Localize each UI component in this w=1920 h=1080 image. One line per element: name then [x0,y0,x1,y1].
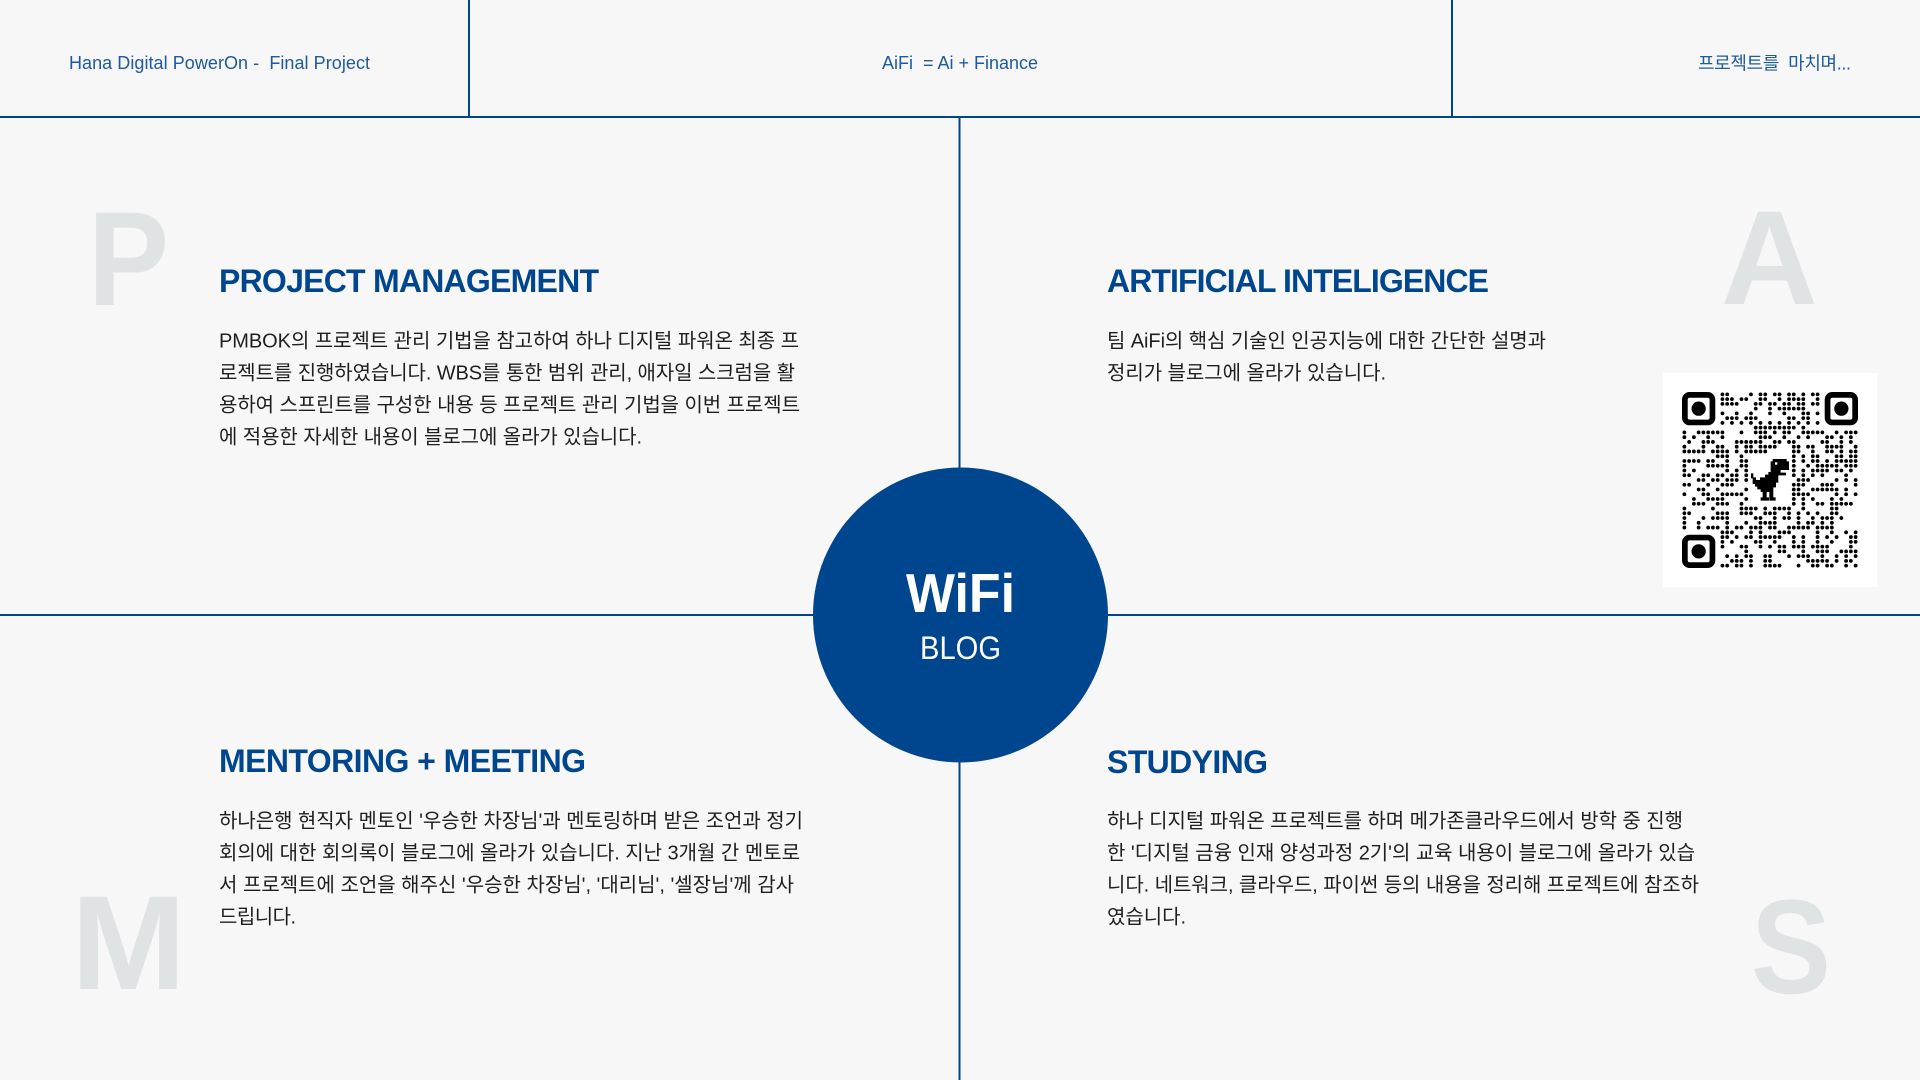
label: BLOG: BLOG [920,630,1001,666]
panel: project management [88,185,800,448]
center circle: WiFi blog [813,468,1108,762]
text block: studying: 였습니다. [1107,906,1186,928]
watermark letter M: M [71,869,186,1018]
header: closing note: 프로젝트를 마치며... [1698,54,1851,74]
text block: project management [219,330,800,448]
panel: studying [1107,744,1831,1022]
header: project name: Hana Digital PowerOn - Final Project [69,53,370,73]
text block: project management: 에 적용한 자세한 내용이 블로그에 올라가 있습니다. [219,426,642,448]
qr data modules [1684,394,1856,566]
logo text: WiFi: WiFi [906,562,1015,624]
text block: mentoring: 서 프로젝트에 조언을 해주신 '우승한 차장님', '대리님', '셀장님'께 감사 [219,874,794,896]
text block: studying: 한 '디지털 금융 인재 양성과정 2기'의 교육 내용이 블로그에 올라가 있습 [1107,842,1695,864]
watermark letter P: P [88,185,169,334]
text block: mentoring: 하나은행 현직자 멘토인 '우승한 차장님'과 멘토링하며 받은 조언과 정기 [219,810,803,832]
qr finder patterns [1685,395,1855,565]
heading: project management: PROJECT MANAGEMENT [219,263,599,299]
text block: artificial intelligence: 팀 AiFi의 핵심 기술인 인공지능에 대한 간단한 설명과 [1107,330,1546,352]
panel: artificial intelligence [1107,184,1818,384]
text block: studying: 니다. 네트워크, 클라우드, 파이썬 등의 내용을 정리해 프로젝트에 참조하 [1107,874,1699,896]
text block: studying [1107,810,1699,928]
text block: artificial intelligence [1107,330,1546,384]
text block: studying: 하나 디지털 파워온 프로젝트를 하며 메가존클라우드에서 방학 중 진행 [1107,810,1683,832]
text block: mentoring: 드립니다. [219,906,296,928]
heading: artificial inteligence: ARTIFICIAL INTELIGENCE [1107,263,1489,299]
text block: mentoring [219,810,803,928]
watermark letter S: S [1751,873,1831,1022]
icon: pixel dinosaur [1751,459,1789,501]
text block: artificial intelligence: 정리가 블로그에 올라가 있습니다. [1107,362,1386,384]
panel: mentoring and meeting [71,743,803,1018]
QR code with dinosaur [1663,373,1877,587]
heading: mentoring + meeting: MENTORING + MEETING [219,743,586,779]
heading: studying: STUDYING [1107,744,1268,780]
text block: project management: PMBOK의 프로젝트 관리 기법을 참고하여 하나 디지털 파워온 최종 프 [219,330,799,352]
text block: project management: 용하여 스프린트를 구성한 내용 등 프로젝트 관리 기법을 이번 프로젝트 [219,394,800,416]
text block: mentoring: 회의에 대한 회의록이 블로그에 올라가 있습니다. 지난 3개월 간 멘토로 [219,842,800,864]
watermark letter A: A [1721,184,1818,333]
header: team tagline: AiFi = Ai + Finance [882,53,1038,73]
text block: project management: 로젝트를 진행하였습니다. WBS를 통한 범위 관리, 애자일 스크럼을 활 [219,362,795,384]
